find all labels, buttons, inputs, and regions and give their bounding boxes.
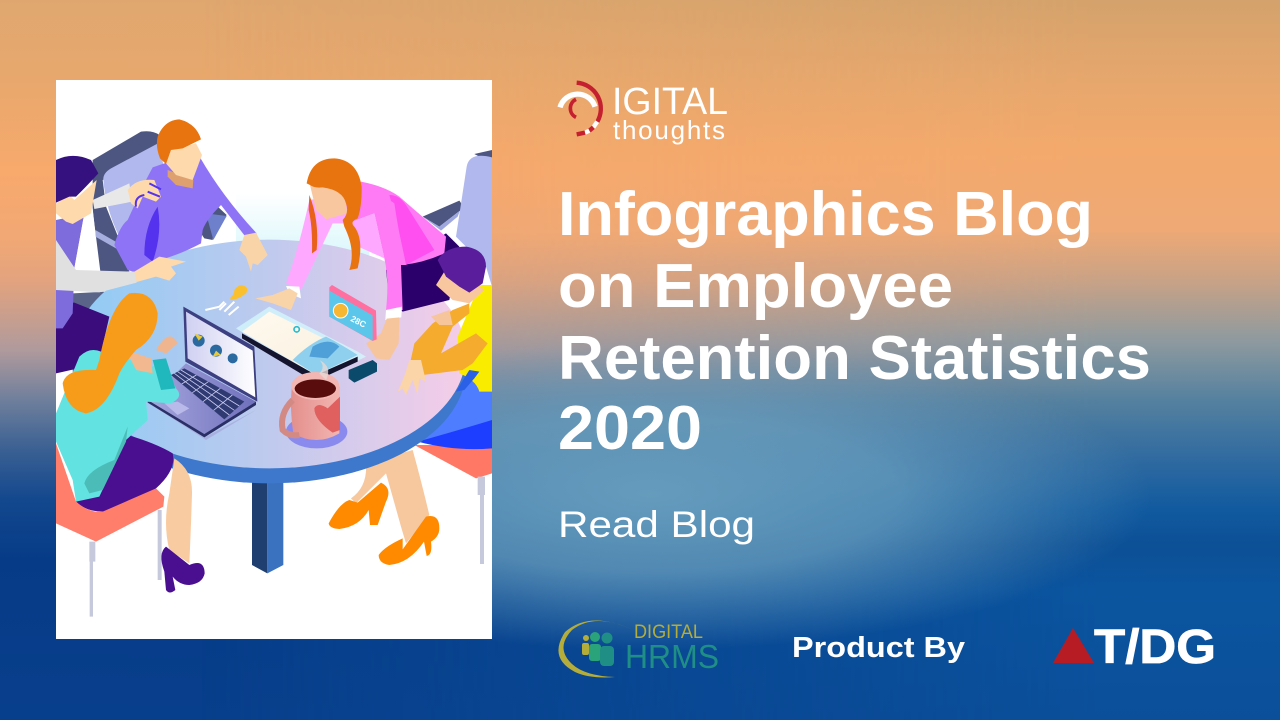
title: Infographics Blog xyxy=(558,180,1093,249)
legs and orange shoes xyxy=(329,450,439,565)
people icon xyxy=(582,632,614,666)
left chair arm xyxy=(73,292,110,310)
man with orange hair xyxy=(114,119,268,273)
title: on Employee xyxy=(558,252,953,321)
man's chair xyxy=(93,131,227,277)
man with dark purple hair xyxy=(56,156,186,373)
cloud icon xyxy=(230,285,247,300)
title: 2020 xyxy=(558,394,702,463)
table leg xyxy=(252,480,283,573)
weather card with temperature xyxy=(329,285,377,341)
logo subline: thoughts xyxy=(613,115,725,145)
keyboard xyxy=(171,368,244,419)
illustration panel: team meeting around a table xyxy=(56,80,492,639)
product by label: Product By xyxy=(792,632,965,664)
skirt of the teal woman xyxy=(76,435,173,512)
logo: Digital HRMS: DIGITAL xyxy=(634,622,703,643)
right coral chair xyxy=(400,445,492,564)
blue trousers under table xyxy=(418,373,492,449)
logo: T/DG: T/DG xyxy=(1094,621,1216,674)
swoosh xyxy=(558,620,633,677)
weather card with temperature: 28C xyxy=(349,314,368,330)
coffee mug on saucer xyxy=(282,360,347,448)
left coral chair xyxy=(56,443,164,617)
glow above table xyxy=(236,193,369,260)
woman in pink xyxy=(255,158,459,360)
logo arcs xyxy=(560,83,601,134)
logo wordmark: IGITAL xyxy=(612,81,728,123)
tablet with hologram xyxy=(236,307,366,382)
right back chair xyxy=(423,150,492,287)
woman in yellow with purple hair xyxy=(398,247,492,395)
laptop xyxy=(146,307,257,440)
logo: Digital HRMS xyxy=(558,620,719,677)
small dark device xyxy=(349,360,377,383)
logo: Digital Thoughts xyxy=(560,81,728,145)
teal woman upper body and hair xyxy=(56,293,179,502)
read blog link: Read Blog xyxy=(558,504,755,545)
logo: Digital HRMS: HRMS xyxy=(625,638,719,675)
table xyxy=(73,240,466,483)
data flow icon xyxy=(205,302,239,315)
title: Retention Statistics xyxy=(558,324,1151,393)
title xyxy=(558,180,1151,463)
teal woman's leg and purple shoe xyxy=(161,458,205,592)
